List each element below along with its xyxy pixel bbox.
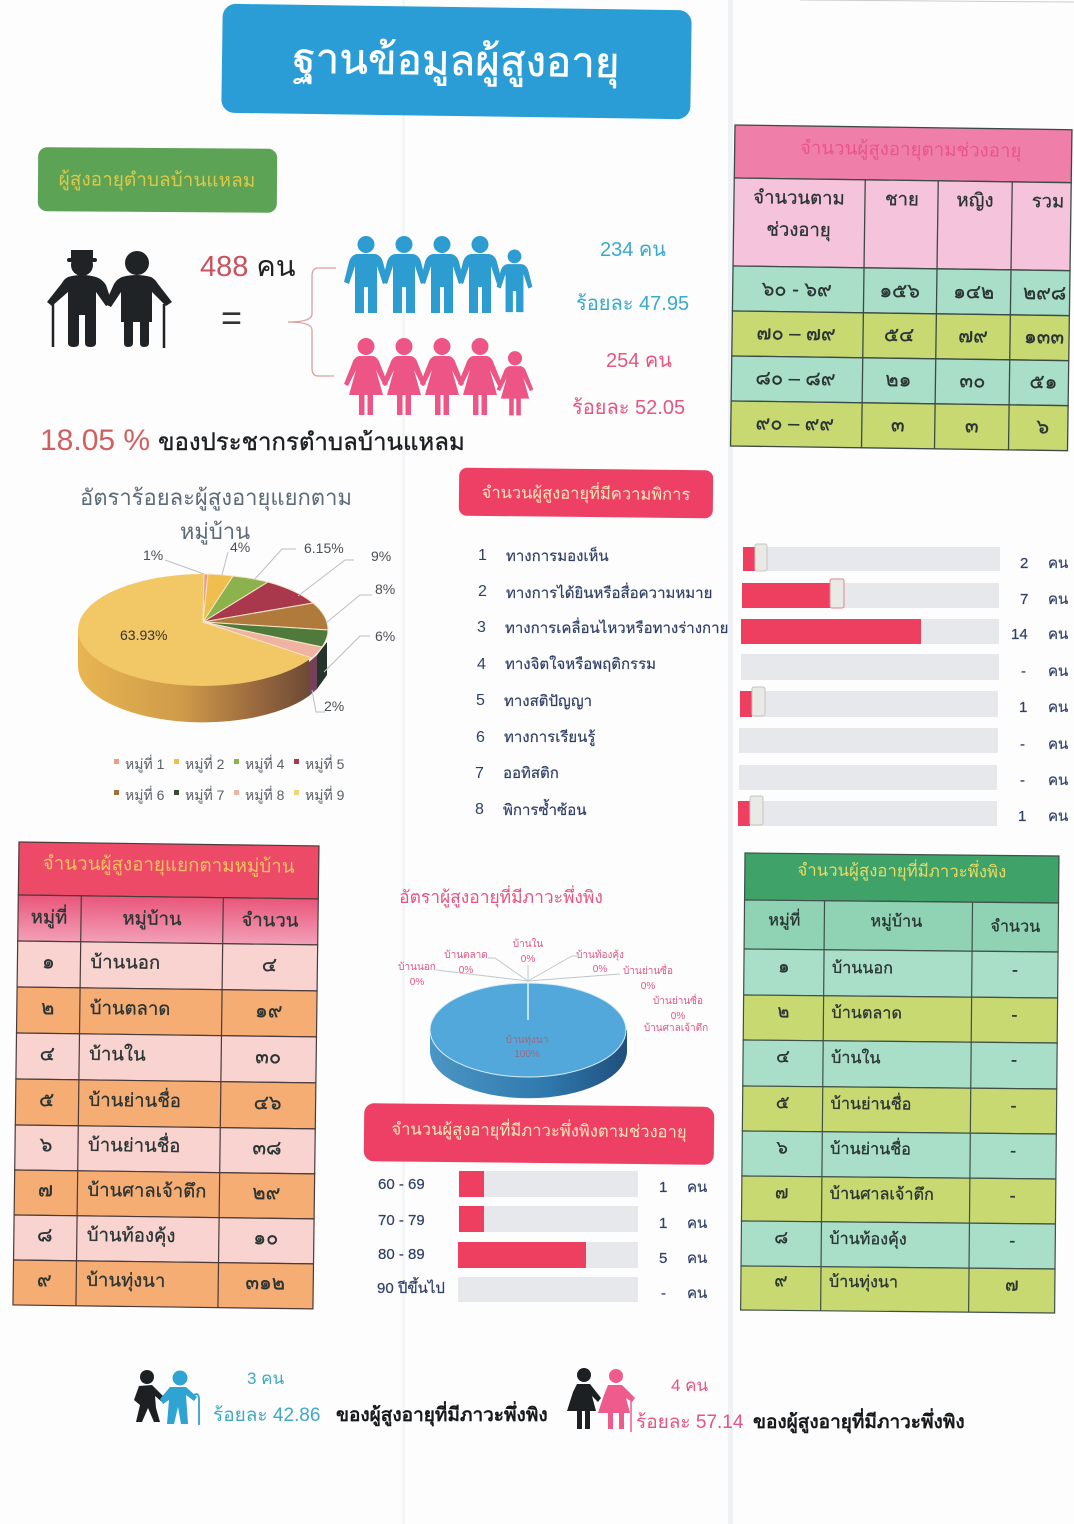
disability type list: 8 bbox=[475, 801, 484, 818]
disability type list bbox=[475, 546, 728, 819]
pie chart: elderly by village: หมู่บ้าน bbox=[180, 519, 250, 545]
female dependent share: ร้อยละ 57.14 bbox=[636, 1412, 744, 1433]
disability type list: ทางสติปัญญา bbox=[504, 693, 592, 710]
table: elderly by age range: ๑๓๓ bbox=[1024, 326, 1064, 349]
table: elderly by village: หมู่บ้าน bbox=[122, 907, 182, 930]
icon: female figures bbox=[344, 338, 533, 415]
table: elderly by age range: ๕๔ bbox=[884, 324, 914, 347]
table: elderly by age range: ๙๐ – ๙๙ bbox=[755, 412, 834, 435]
disability counts: 14 bbox=[1011, 626, 1028, 643]
table: elderly by age range: ๘๐ – ๘๙ bbox=[755, 367, 836, 390]
table: elderly by age range: ช่วงอายุ bbox=[766, 218, 831, 242]
table: elderly by age range: ๑๔๒ bbox=[953, 281, 994, 304]
pie legend: หมู่ที่ 2 bbox=[185, 755, 225, 773]
pie legend: หมู่ที่ 6 bbox=[125, 786, 165, 804]
disability type list: ทางการเคลื่อนไหวหรือทางร่างกาย bbox=[505, 617, 728, 637]
pie chart: dependent elderly rate: บ้านนอก bbox=[398, 961, 436, 973]
bars: dependent elderly by age: คน bbox=[687, 1250, 707, 1267]
pie chart: elderly by village: 9% bbox=[371, 548, 391, 564]
table: dependent elderly by village: ๑ bbox=[778, 956, 790, 976]
table: dependent elderly by village: ๕ bbox=[776, 1092, 790, 1112]
male dependent share: ร้อยละ 42.86 bbox=[213, 1405, 320, 1426]
table: elderly by village: ๔ bbox=[262, 954, 277, 976]
table: dependent elderly by village: บ้านทุ่งนา bbox=[829, 1273, 898, 1292]
bars: dependent elderly by age: คน bbox=[687, 1179, 707, 1196]
disability type list: ทางการเรียนรู้ bbox=[504, 729, 595, 746]
bars: dependent elderly by age: 90 ปีขึ้นไป bbox=[377, 1277, 445, 1297]
table: elderly by village: ๓๐ bbox=[255, 1046, 281, 1068]
table: dependent elderly by village: - bbox=[1011, 1050, 1017, 1070]
disability counts: คน bbox=[1048, 736, 1068, 753]
male dependent share: ของผู้สูงอายุที่มีภาวะพึ่งพิง bbox=[336, 1401, 548, 1427]
table: dependent elderly by village: จำนวน bbox=[990, 917, 1040, 936]
table: elderly by village: ๗ bbox=[38, 1179, 53, 1201]
disability counts: คน bbox=[1048, 772, 1068, 789]
heading: elderly with disabilities: จำนวนผู้สูงอายุที่มีความพิการ bbox=[482, 481, 691, 505]
table: dependent elderly by village: ๘ bbox=[774, 1227, 788, 1247]
table: dependent elderly by village: ๗ bbox=[775, 1182, 789, 1202]
pie chart: dependent elderly rate: บ้านตลาด bbox=[444, 949, 488, 961]
female statistics bbox=[572, 350, 685, 419]
table: elderly by village: ๕ bbox=[39, 1089, 54, 1111]
table: elderly by age range bbox=[731, 125, 1072, 451]
table: dependent elderly by village: บ้านตลาด bbox=[831, 1004, 902, 1023]
table: elderly by village: ๑๐ bbox=[253, 1227, 278, 1249]
table: elderly by village: ๔ bbox=[40, 1043, 55, 1065]
pie chart: dependent elderly rate: บ้านทุ่งนา bbox=[506, 1034, 548, 1046]
pie chart: dependent elderly rate: บ้านย่านซื่อ bbox=[623, 963, 673, 977]
table: elderly by village: ๑ bbox=[42, 951, 55, 973]
disability counts: 7 bbox=[1020, 591, 1028, 608]
table: elderly by village: ๒๙ bbox=[252, 1182, 280, 1204]
disability counts: คน bbox=[1048, 663, 1068, 680]
pie legend: หมู่ที่ 5 bbox=[305, 755, 345, 773]
table: dependent elderly by village: ๗ bbox=[1005, 1275, 1019, 1295]
table: dependent elderly by village: บ้านย่านชื่อ bbox=[831, 1092, 911, 1114]
disability type list: 3 bbox=[477, 619, 486, 636]
disability counts: 1 bbox=[1019, 699, 1027, 716]
male statistics: ร้อยละ 47.95 bbox=[576, 293, 689, 315]
female statistics: 254 คน bbox=[606, 350, 672, 372]
pie chart: dependent elderly rate: 0% bbox=[671, 1011, 685, 1022]
table: dependent elderly by village: - bbox=[1010, 1141, 1016, 1161]
disability counts bbox=[1011, 555, 1068, 825]
table: dependent elderly by village: ๙ bbox=[774, 1270, 788, 1290]
disability counts: คน bbox=[1048, 808, 1068, 825]
disability bars bbox=[738, 544, 1000, 826]
table: dependent elderly by village: บ้านท้องคุ้ง bbox=[829, 1230, 907, 1250]
heading: dependent elderly by age bbox=[364, 1103, 714, 1165]
disability type list: ทางจิตใจหรือพฤติกรรม bbox=[505, 655, 656, 673]
table: dependent elderly by village: หมู่บ้าน bbox=[870, 912, 922, 932]
table: elderly by village: จำนวนผู้สูงอายุแยกตามหมู่บ้าน bbox=[43, 852, 295, 879]
pie legend: หมู่ที่ 9 bbox=[305, 786, 345, 804]
pie chart: dependent elderly rate: อัตราผู้สูงอายุที่มีภาวะพึ่งพิง bbox=[399, 885, 603, 908]
disability type list: ทางการได้ยินหรือสื่อความหมาย bbox=[506, 582, 712, 602]
table: elderly by age range: ๒๑ bbox=[885, 369, 912, 391]
table: elderly by age range: ๖ bbox=[1036, 416, 1049, 438]
table: elderly by village: ๒ bbox=[41, 997, 55, 1019]
table: dependent elderly by village: - bbox=[1012, 960, 1018, 980]
table: elderly by age range: ๑๕๖ bbox=[879, 280, 920, 303]
heading: dependent elderly by age: จำนวนผู้สูงอายุที่มีภาวะพึ่งพิงตามช่วงอายุ bbox=[391, 1117, 687, 1143]
male dependent share: 3 คน bbox=[247, 1369, 285, 1388]
table: elderly by village: ๘ bbox=[37, 1224, 53, 1246]
table: elderly by village: ๔๖ bbox=[254, 1092, 282, 1114]
pie chart: elderly by village: 1% bbox=[143, 547, 163, 563]
table: elderly by village: บ้านย่านชื่อ bbox=[88, 1132, 181, 1156]
table: dependent elderly by village: บ้านศาลเจ้าตึก bbox=[830, 1185, 934, 1204]
table: elderly by village: หมู่ที่ bbox=[31, 904, 67, 929]
pie chart: elderly by village bbox=[78, 485, 395, 804]
disability type list: 7 bbox=[475, 765, 484, 782]
pie chart: dependent elderly rate: บ้านใน bbox=[513, 938, 543, 950]
icon: elderly couple bbox=[47, 250, 172, 348]
total elderly count bbox=[200, 251, 296, 338]
table: elderly by village: ๓๑๒ bbox=[245, 1272, 285, 1295]
table: dependent elderly by village: ๔ bbox=[776, 1046, 790, 1066]
total elderly count: 488 คน bbox=[200, 251, 296, 283]
table: elderly by age range: ๗๙ bbox=[958, 325, 988, 348]
table: elderly by village bbox=[13, 842, 319, 1309]
bars: dependent elderly by age: 5 bbox=[659, 1250, 667, 1267]
table: dependent elderly by village: จำนวนผู้สูงอายุที่มีภาวะพึ่งพิง bbox=[797, 858, 1006, 883]
disability type list: 2 bbox=[478, 583, 487, 600]
disability type list: 6 bbox=[476, 729, 485, 746]
female dependent share bbox=[636, 1376, 965, 1434]
pie chart: dependent elderly rate: บ้านย่านซื่อ bbox=[653, 993, 703, 1007]
table: elderly by age range: จำนวนตาม bbox=[753, 186, 845, 209]
total elderly count: = bbox=[221, 297, 242, 338]
pie chart: elderly by village: 6% bbox=[375, 628, 395, 644]
male statistics: 234 คน bbox=[600, 239, 666, 261]
table: elderly by village: บ้านท้องคุ้ง bbox=[87, 1224, 176, 1248]
pie legend: หมู่ที่ 8 bbox=[245, 786, 285, 804]
disability counts: 1 bbox=[1018, 808, 1026, 825]
disability counts: คน bbox=[1048, 591, 1068, 608]
table: elderly by age range: ๓ bbox=[965, 415, 979, 437]
disability counts: 2 bbox=[1020, 555, 1028, 572]
table: elderly by age range: หญิง bbox=[956, 189, 994, 212]
table: elderly by village: บ้านตลาด bbox=[90, 997, 171, 1019]
table: dependent elderly by village bbox=[741, 853, 1059, 1313]
table: elderly by age range: ๒๙๘ bbox=[1023, 282, 1066, 305]
pie chart: dependent elderly rate: 0% bbox=[459, 965, 473, 976]
table: dependent elderly by village: ๒ bbox=[777, 1001, 790, 1021]
icon: dependent male pair bbox=[134, 1370, 199, 1425]
table: elderly by village: ๙ bbox=[37, 1269, 52, 1291]
table: elderly by village: บ้านทุ่งนา bbox=[86, 1269, 165, 1293]
bars: dependent elderly by age: 1 bbox=[659, 1179, 667, 1196]
pie chart: dependent elderly rate: 0% bbox=[593, 964, 607, 975]
table: elderly by village: บ้านใน bbox=[89, 1043, 146, 1065]
disability type list: 4 bbox=[477, 656, 486, 673]
disability type list: ออทิสติก bbox=[503, 765, 559, 782]
bars: dependent elderly by age: คน bbox=[687, 1285, 707, 1302]
share of subdistrict population: 18.05 % ของประชากรตำบลบ้านแหลม bbox=[40, 424, 465, 457]
male dependent share bbox=[213, 1369, 548, 1427]
paper fold lines bbox=[402, 0, 1074, 1524]
table: elderly by age range: ๕๑ bbox=[1029, 371, 1058, 394]
pie chart: elderly by village: อัตราร้อยละผู้สูงอายุแยกตาม bbox=[80, 485, 352, 511]
disability type list: 1 bbox=[478, 547, 487, 564]
pie chart: elderly by village: 2% bbox=[324, 698, 344, 714]
disability type list: ทางการมองเห็น bbox=[506, 546, 609, 565]
table: elderly by age range: ๓ bbox=[891, 414, 905, 436]
heading: elderly in Ban Laem subdistrict bbox=[38, 147, 277, 213]
disability counts: คน bbox=[1048, 555, 1068, 572]
disability counts: - bbox=[1021, 663, 1026, 680]
disability counts: - bbox=[1020, 772, 1025, 789]
pie chart: dependent elderly rate: 0% bbox=[521, 954, 535, 965]
pie chart: dependent elderly rate: บ้านศาลเจ้าตึก bbox=[644, 1022, 708, 1034]
table: elderly by village: ๖ bbox=[40, 1134, 53, 1156]
table: dependent elderly by village: - bbox=[1009, 1231, 1015, 1251]
table: dependent elderly by village: ๖ bbox=[776, 1137, 788, 1157]
title banner: ฐานข้อมูลผู้สูงอายุ bbox=[292, 35, 620, 89]
pie chart: elderly by village: 63.93% bbox=[120, 627, 167, 643]
table: elderly by village: บ้านย่านชื่อ bbox=[88, 1087, 181, 1111]
table: dependent elderly by village: บ้านย่านชื่อ bbox=[830, 1137, 911, 1159]
pie chart: dependent elderly rate: บ้านท้องคุ้ง bbox=[576, 949, 624, 961]
bars: dependent elderly by age: คน bbox=[687, 1215, 707, 1232]
table: elderly by village: ๑๙ bbox=[255, 1000, 283, 1022]
pie legend: หมู่ที่ 7 bbox=[185, 786, 225, 804]
female dependent share: 4 คน bbox=[671, 1376, 709, 1395]
table: elderly by age range: ชาย bbox=[885, 188, 919, 210]
pie chart: dependent elderly rate: 0% bbox=[641, 981, 655, 992]
bars: dependent elderly by age: 70 - 79 bbox=[378, 1212, 425, 1229]
table: dependent elderly by village: หมู่ที่ bbox=[768, 908, 800, 931]
icon: dependent female pair bbox=[567, 1368, 635, 1432]
bars: dependent elderly by age bbox=[377, 1171, 707, 1302]
table: dependent elderly by village: บ้านใน bbox=[831, 1048, 881, 1067]
pie chart: elderly by village: 8% bbox=[375, 581, 395, 597]
table: elderly by village: จำนวน bbox=[241, 909, 299, 931]
pie legend: หมู่ที่ 4 bbox=[245, 755, 285, 773]
table: dependent elderly by village: - bbox=[1010, 1186, 1016, 1206]
table: elderly by age range: ๗๐ – ๗๙ bbox=[756, 322, 836, 345]
table: dependent elderly by village: บ้านนอก bbox=[832, 959, 893, 977]
table: elderly by village: บ้านศาลเจ้าตึก bbox=[87, 1179, 207, 1201]
bars: dependent elderly by age: 80 - 89 bbox=[378, 1246, 425, 1263]
table: elderly by village: ๓๘ bbox=[252, 1137, 282, 1159]
pie chart: elderly by village: 6.15% bbox=[304, 540, 344, 556]
disability type list: พิการซ้ำซ้อน bbox=[503, 799, 586, 819]
pie chart: dependent elderly rate: 0% bbox=[410, 977, 424, 988]
icon: male figures bbox=[344, 236, 532, 313]
table: elderly by age range: รวม bbox=[1032, 190, 1064, 212]
table: elderly by age range: ๖๐ - ๖๙ bbox=[762, 278, 832, 301]
bars: dependent elderly by age: 1 bbox=[659, 1215, 667, 1232]
disability counts: - bbox=[1020, 736, 1025, 753]
disability counts: คน bbox=[1048, 626, 1068, 643]
table: dependent elderly by village: - bbox=[1011, 1005, 1018, 1025]
table: elderly by village: บ้านนอก bbox=[90, 951, 160, 973]
bars: dependent elderly by age: 60 - 69 bbox=[378, 1176, 425, 1193]
bracket bbox=[288, 268, 336, 376]
pie chart: dependent elderly rate bbox=[398, 885, 708, 1098]
table: dependent elderly by village: - bbox=[1010, 1096, 1017, 1116]
table: elderly by age range: จำนวนผู้สูงอายุตามช่วงอายุ bbox=[800, 137, 1022, 163]
female dependent share: ของผู้สูงอายุที่มีภาวะพึ่งพิง bbox=[753, 1408, 965, 1434]
pie legend bbox=[114, 755, 345, 804]
female statistics: ร้อยละ 52.05 bbox=[572, 397, 685, 419]
male statistics bbox=[576, 239, 689, 315]
pie chart: dependent elderly rate: 100% bbox=[514, 1049, 540, 1060]
pie legend: หมู่ที่ 1 bbox=[125, 755, 165, 773]
heading: elderly in Ban Laem subdistrict: ผู้สูงอายุตำบลบ้านแหลม bbox=[59, 169, 255, 193]
disability type list: 5 bbox=[476, 692, 485, 709]
title banner bbox=[221, 4, 692, 119]
heading: elderly with disabilities bbox=[459, 468, 713, 518]
table: elderly by age range: ๓๐ bbox=[959, 370, 986, 393]
pie chart: elderly by village: 4% bbox=[230, 539, 250, 555]
bars: dependent elderly by age: - bbox=[661, 1285, 666, 1302]
disability counts: คน bbox=[1048, 699, 1068, 716]
